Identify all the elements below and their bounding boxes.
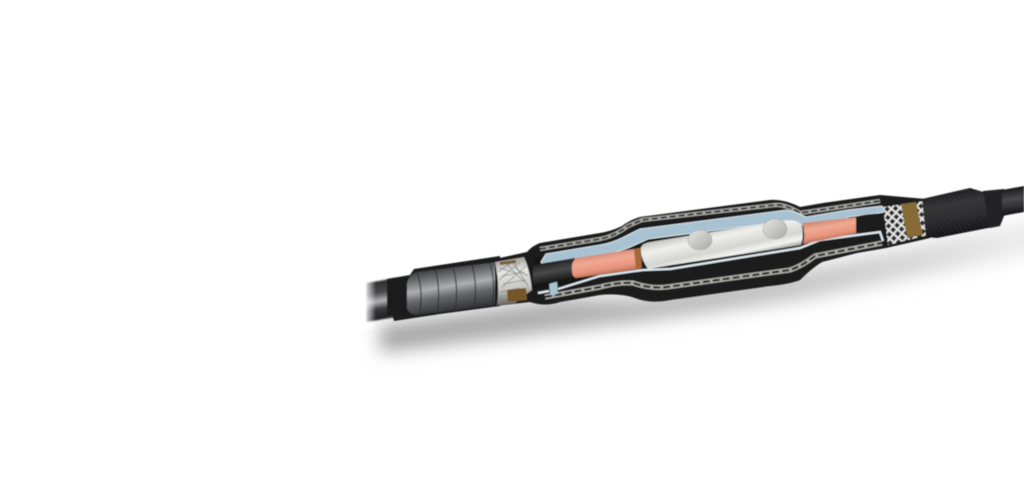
left cable end bbox=[366, 278, 396, 322]
right carbon sleeve bbox=[922, 188, 998, 238]
silver connector bbox=[641, 220, 803, 269]
blue insulation layer bbox=[541, 206, 886, 270]
copper conductor, right bbox=[802, 217, 858, 244]
brown patch, left bbox=[500, 260, 527, 302]
blue end block bbox=[549, 280, 558, 295]
left stepped black sleeve bbox=[387, 256, 500, 321]
left dark conductor insulation bbox=[533, 258, 575, 288]
connector dimples bbox=[688, 219, 787, 250]
crimp band, left bbox=[634, 248, 642, 269]
right cable end bbox=[1002, 186, 1024, 216]
copper conductor, left bbox=[572, 248, 640, 278]
silver braid, left bbox=[495, 257, 532, 305]
outer joint body bbox=[495, 195, 930, 306]
brown band, right bbox=[901, 202, 923, 238]
right dark conductor insulation bbox=[856, 213, 888, 233]
cable assembly bbox=[366, 186, 1024, 322]
braided chain mesh, bottom bbox=[545, 243, 882, 297]
left edge fade bbox=[360, 270, 378, 330]
right lattice braid bbox=[883, 201, 928, 245]
cast shadow bbox=[380, 218, 1024, 352]
white sheath line bbox=[538, 232, 883, 293]
braided chain mesh, top bbox=[540, 201, 880, 249]
right stepped sleeve bbox=[983, 189, 1004, 228]
left taped metal section bbox=[407, 262, 497, 315]
inner cavity bbox=[535, 212, 880, 290]
